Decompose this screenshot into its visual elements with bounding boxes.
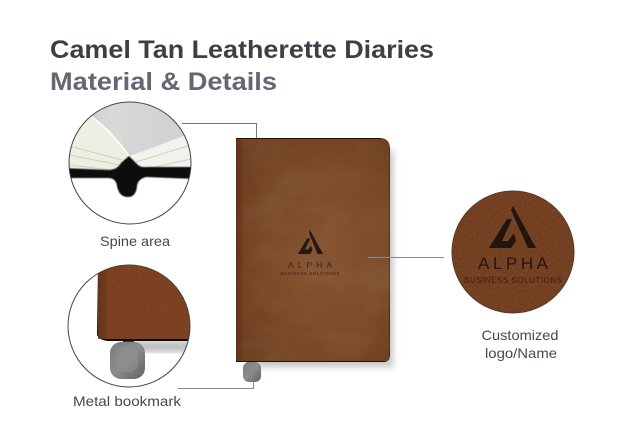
- circle photo: metal bookmark: [68, 265, 195, 387]
- enlarged logo: ALPHA: [478, 254, 549, 273]
- diary logo: BUSINESS SOLUTIONS: [280, 271, 340, 277]
- diary: [236, 138, 393, 382]
- label: customized logo/name: Customized: [482, 327, 558, 343]
- enlarged logo: [464, 206, 562, 285]
- shadow: [255, 150, 393, 367]
- circle photo: customized logo: [452, 191, 574, 313]
- label: customized logo/name: logo/Name: [485, 345, 557, 361]
- title: [50, 36, 434, 96]
- label: spine area: Spine area: [100, 233, 170, 249]
- title: Material & Details: [50, 68, 277, 96]
- connector: logo to diary: [368, 256, 444, 258]
- cover: [236, 138, 390, 362]
- connector: spine area to diary: [182, 124, 256, 138]
- icon: bookmark charm: [243, 360, 261, 382]
- circle photo: spine area: [60, 102, 195, 224]
- title: Camel Tan Leatherette Diaries: [50, 36, 434, 64]
- diary logo: ALPHA: [288, 260, 332, 270]
- diary logo: [280, 230, 340, 277]
- label: customized logo/name: [482, 327, 558, 361]
- label: metal bookmark: Metal bookmark: [73, 393, 182, 409]
- enlarged logo: BUSINESS SOLUTIONS: [464, 276, 562, 285]
- connector: metal bookmark to diary: [178, 381, 254, 388]
